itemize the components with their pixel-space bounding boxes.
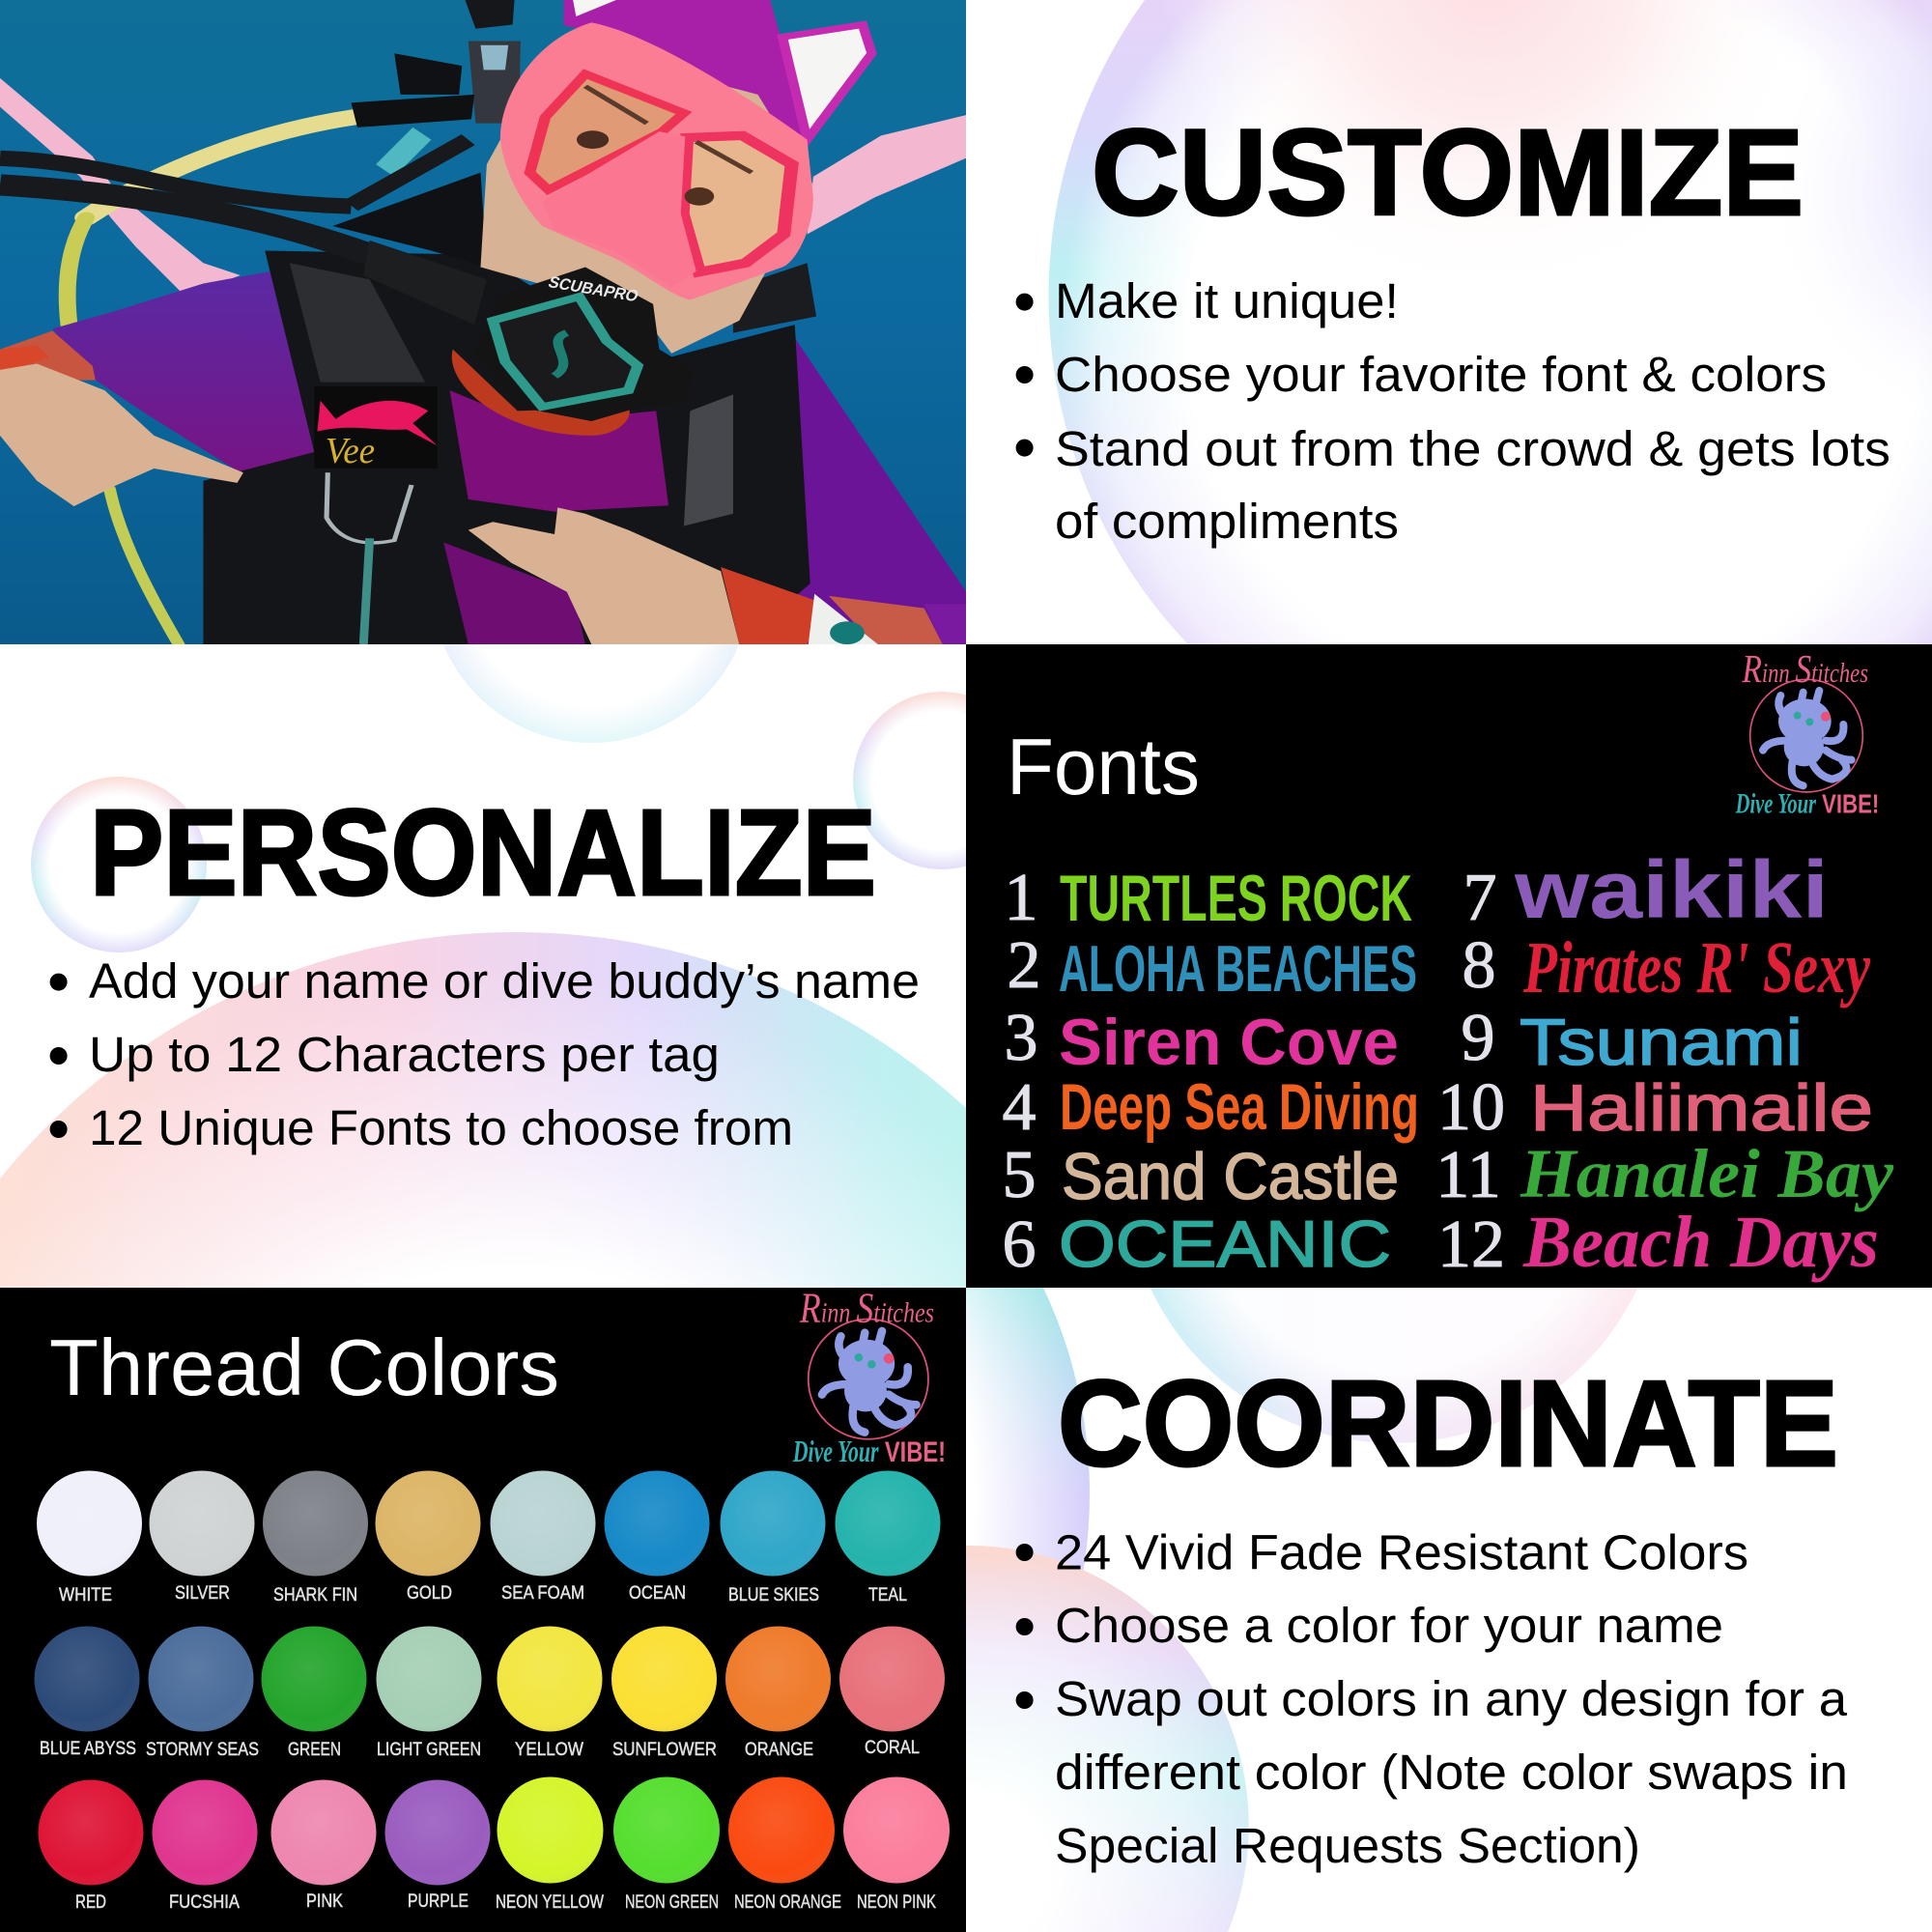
swatch: stormy seas [146,1627,259,1760]
pink mask [500,22,813,300]
heading: Fonts: Fonts [1007,722,1200,811]
font list: samples: Hanalei Bay [1520,1135,1894,1212]
black hoses [0,140,469,257]
left hand pointing [0,330,243,506]
swatch: sunflower: SUNFLOWER [612,1740,717,1760]
heading: Thread Colors: Thread Colors [49,1322,559,1412]
swatch: silver [149,1470,255,1604]
font list: samples: TURTLES ROCK [1060,862,1412,935]
bullet list: personalize: Up to 12 Characters per tag [89,1027,720,1082]
font list: samples: ALOHA BEACHES [1059,932,1417,1006]
panel: thread colors [0,1283,966,1932]
font list: numbers: 4 [1003,1070,1036,1145]
font list: numbers: 10 [1437,1070,1505,1145]
font list: numbers: 11 [1435,1138,1501,1212]
swatch: sea foam [491,1470,595,1604]
panel: fonts [966,644,1932,1288]
purple wetsuit [52,271,966,644]
swatch: orange: ORANGE [745,1740,813,1760]
swatch: stormy seas: STORMY SEAS [146,1740,259,1760]
swatch: purple: PURPLE [408,1891,469,1912]
swatch: gold [375,1470,481,1604]
panel: personalize [0,422,1031,1288]
background bubble [1049,0,1932,644]
swatch: shark fin [263,1470,368,1605]
yellow air hose [68,117,355,644]
background bubbles [0,422,1031,1288]
swatch: neon yellow [496,1777,604,1913]
hood [564,0,871,144]
swatch: teal: TEAL [868,1585,907,1605]
bullet list: customize: Make it unique! [1055,273,1399,328]
bullet list: coordinate: Special Requests Section) [1055,1818,1640,1873]
name tag: Vee [326,430,375,471]
swatch: red [39,1779,143,1913]
swatch: shark fin: SHARK FIN [273,1585,357,1605]
heading: CUSTOMIZE: CUSTOMIZE [1092,104,1804,241]
bullet list: coordinate: Choose a color for your name [1055,1598,1723,1653]
bullet list: customize: of compliments [1055,494,1399,549]
bullet list: coordinate: 24 Vivid Fade Resistant Colors [1055,1524,1748,1580]
tank valve [352,0,521,177]
swatch: ocean [605,1470,709,1604]
logo: Rinn Stitches: Dive Your [792,1435,879,1468]
font list: numbers: 7 [1463,861,1497,935]
logo: Rinn Stitches: Dive Your [1735,789,1816,820]
font list: samples: waikiki [1514,844,1829,935]
font list: samples: OCEANIC [1059,1208,1391,1281]
bullet list: coordinate: Swap out colors in any design for a [1055,1671,1848,1726]
font list: samples: Tsunami [1520,1006,1803,1079]
swatch: blue abyss: BLUE ABYSS [40,1739,136,1759]
bullet list: coordinate [1016,1524,1848,1873]
font list: numbers: 2 [1007,928,1041,1003]
logo: Rinn Stitches: Rinn Stitches [799,1283,934,1331]
swatch: blue abyss [35,1627,139,1759]
swatch: coral: CORAL [865,1738,920,1758]
swatch: pink [270,1779,377,1912]
swatch: neon pink: NEON PINK [857,1892,936,1913]
swatch: neon yellow: NEON YELLOW [496,1892,604,1913]
swatch: neon orange: NEON ORANGE [734,1892,841,1913]
font list: samples: Beach Days [1522,1202,1879,1283]
logo: Rinn Stitches: VIBE! [1822,789,1879,819]
font list: numbers [1003,861,1505,1282]
font list: numbers: 12 [1437,1208,1505,1282]
swatch: coral [839,1627,945,1758]
logo: Rinn Stitches [792,1283,946,1468]
thread swatches: row 3 [39,1777,950,1913]
swatch: teal [835,1470,941,1605]
swatch: fucshia [153,1779,257,1913]
logo: Rinn Stitches: VIBE! [885,1436,946,1468]
swatch: blue skies: BLUE SKIES [728,1585,819,1605]
font list: numbers: 3 [1005,1001,1037,1075]
pink fins [0,78,966,296]
swatch: ocean: OCEAN [629,1583,686,1604]
swatch: purple [384,1779,491,1912]
swatch: green: GREEN [288,1740,341,1760]
bullet list: customize: Stand out from the crowd & gets lots [1055,421,1890,476]
panel: diver photo [0,0,966,644]
red neck collar [452,350,630,436]
swatch: gold: GOLD [407,1583,452,1604]
font list: numbers: 1 [1005,861,1037,935]
logo: Rinn Stitches: Rinn Stitches [1742,647,1868,692]
bullet list: customize: Choose your favorite font & colors [1055,347,1827,402]
scuba jacket [203,173,816,644]
regulator [487,267,672,421]
logo: Rinn Stitches [1735,647,1879,820]
swatch: blue skies [721,1470,825,1605]
font list: numbers: 6 [1003,1208,1036,1282]
background bubbles [966,898,1662,1932]
swatch: orange [725,1627,831,1760]
bullet list: customize [1016,273,1890,549]
font list: numbers: 5 [1003,1138,1036,1212]
regulator: SCUBAPRO [546,273,641,305]
swatch: red: RED [75,1892,106,1913]
swatch: white [37,1470,142,1605]
thread swatches: row 2 [35,1627,945,1760]
heading: COORDINATE: COORDINATE [1058,1355,1838,1492]
swatch: white: WHITE [59,1585,112,1605]
swatch: sunflower [611,1627,717,1760]
right hand pointing [469,507,966,644]
D-ring clip [327,472,412,644]
font list: numbers: 8 [1463,928,1495,1003]
heading: PERSONALIZE: PERSONALIZE [90,784,876,921]
swatch: light green: LIGHT GREEN [377,1740,481,1760]
swatch: silver: SILVER [175,1583,230,1604]
swatch: neon green [613,1777,720,1913]
bullet list: coordinate: different color (Note color swaps in [1055,1745,1848,1800]
font list: samples: Deep Sea Diving [1060,1070,1419,1144]
name tag [314,386,438,471]
font list: samples: Siren Cove [1059,1006,1399,1079]
swatch: yellow: YELLOW [515,1740,583,1760]
swatch: sea foam: SEA FOAM [501,1583,584,1604]
swatch: yellow [497,1627,603,1760]
swatch: neon green: NEON GREEN [625,1892,719,1913]
panel: customize [966,0,1932,644]
swatch: fucshia: FUCSHIA [169,1892,240,1913]
swatch: green [261,1627,367,1760]
panel: coordinate [966,898,1932,1932]
swatch: neon pink [843,1777,950,1913]
font list: samples: Haliimaile [1530,1071,1873,1145]
swatch: light green [377,1627,481,1760]
bullet list: personalize: 12 Unique Fonts to choose from [89,1100,793,1155]
font list: numbers: 9 [1461,1001,1495,1075]
swatch: pink: PINK [306,1891,343,1912]
font list: samples [1059,844,1894,1283]
bullet list: personalize: Add your name or dive buddy’s name [89,953,920,1009]
chest wetsuit [443,390,668,644]
bullet list: personalize [50,953,920,1155]
font list: samples: Sand Castle [1062,1140,1399,1213]
thread swatches: row 1 [37,1470,941,1605]
face [481,87,813,354]
swatch: neon orange [728,1777,841,1913]
